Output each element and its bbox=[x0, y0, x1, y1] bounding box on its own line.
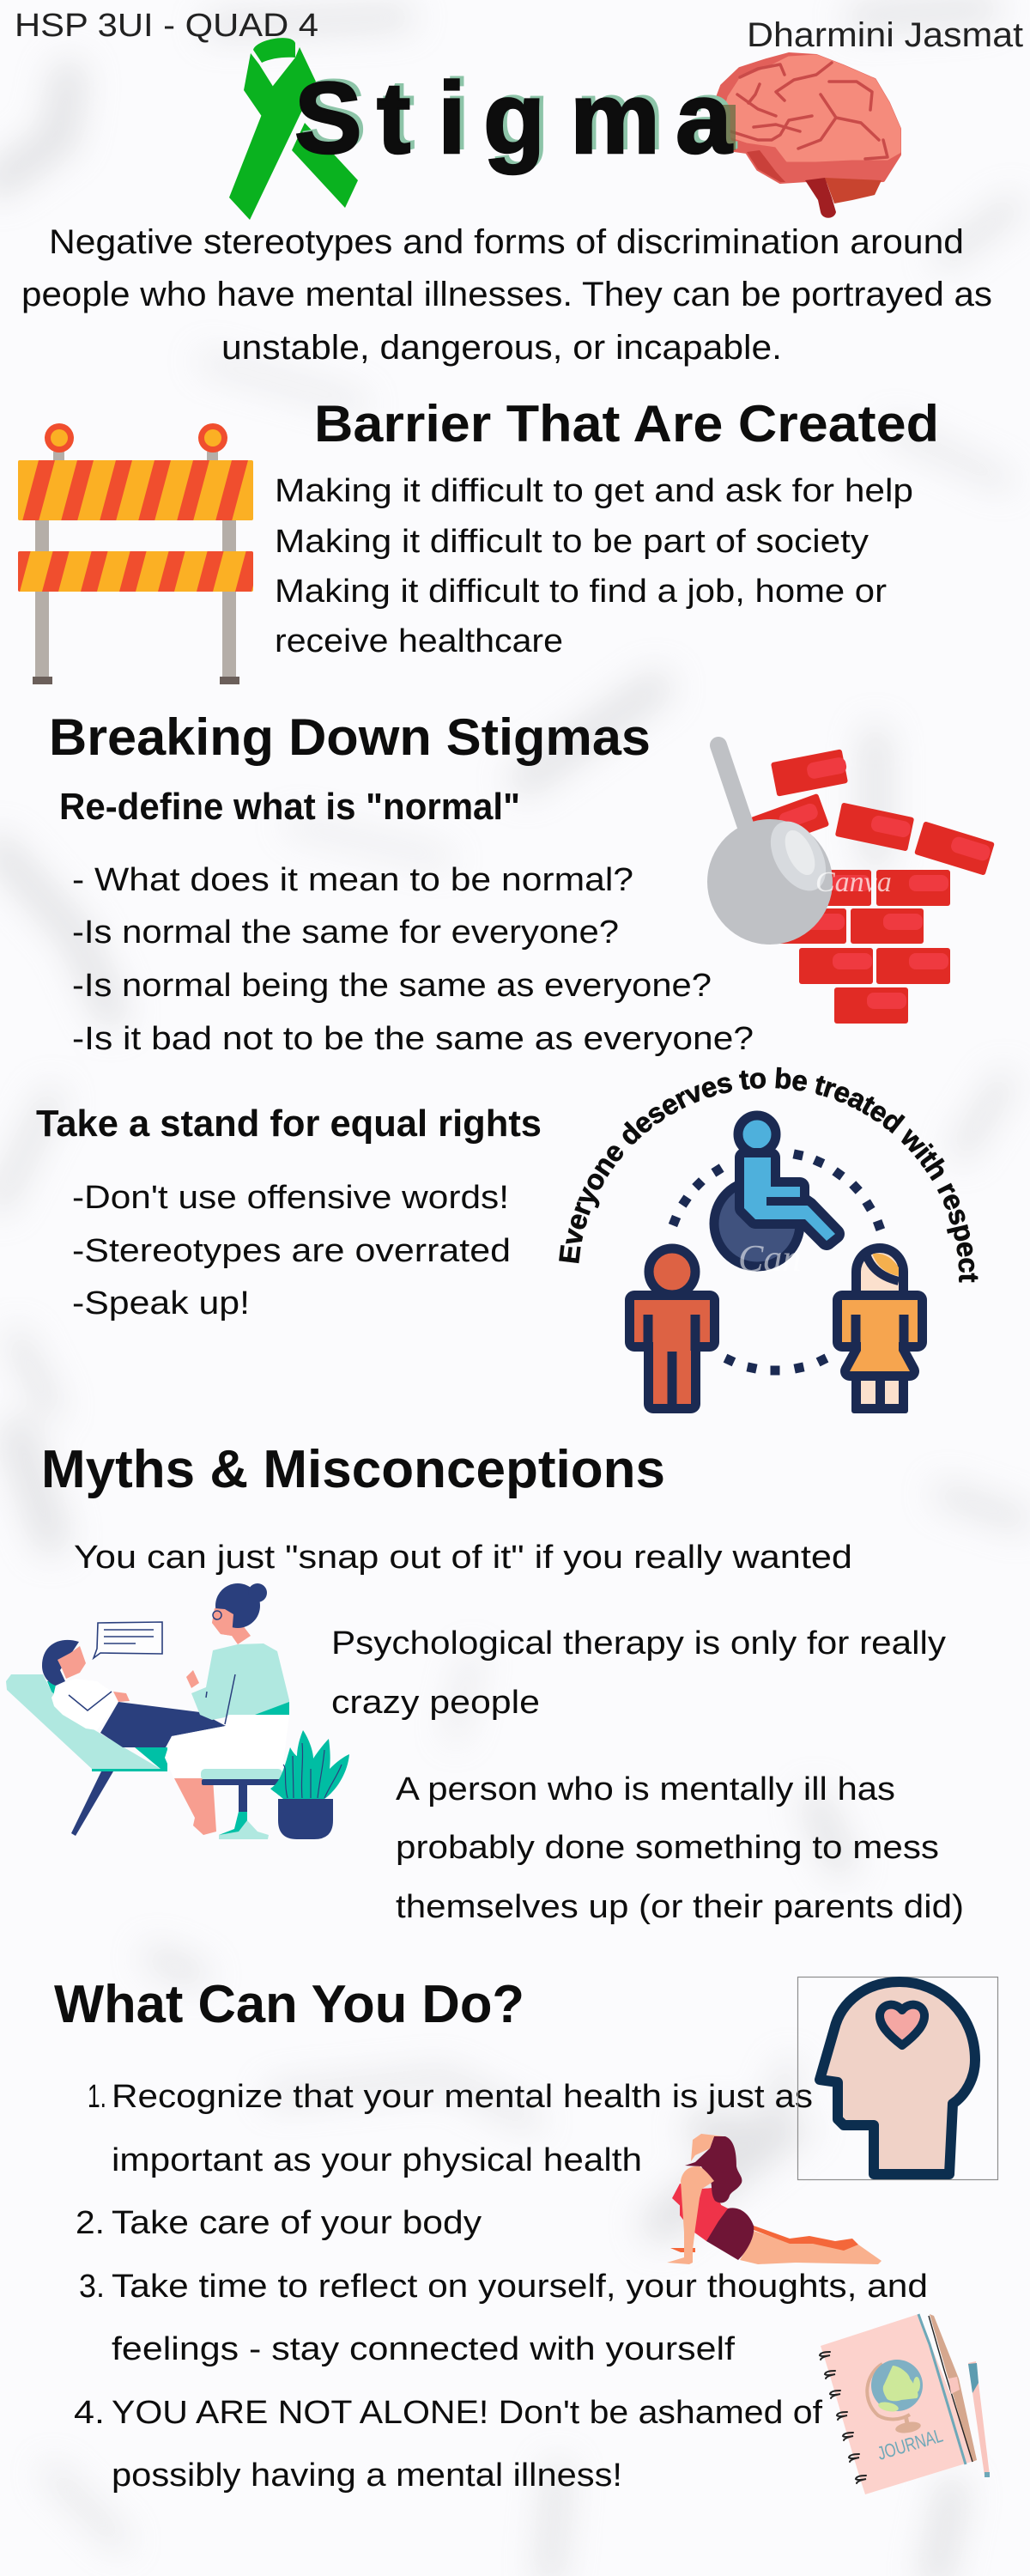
numbered list of actions: important as your physical health bbox=[112, 2142, 642, 2178]
intro text: unstable, dangerous, or incapable. bbox=[221, 329, 782, 367]
barrier list: Making it difficult to be part of society bbox=[275, 524, 869, 560]
normal questions list: -Is it bad not to be the same as everyone? bbox=[72, 1021, 754, 1057]
myth 1: You can just "snap out of it" if you really wanted bbox=[74, 1540, 852, 1576]
numbered list of actions: 4. bbox=[74, 2395, 105, 2431]
author name: Dharmini Jasmat bbox=[747, 16, 1023, 54]
man figure bbox=[634, 1249, 710, 1408]
intro text: people who have mental illnesses. They can be portrayed as bbox=[21, 276, 992, 313]
barrier list: receive healthcare bbox=[275, 623, 563, 659]
icon: brain bbox=[713, 54, 900, 218]
myth 3 bbox=[396, 1771, 964, 1925]
chair bbox=[6, 1674, 167, 1836]
icon: green awareness ribbon bbox=[229, 38, 358, 220]
myth 3: probably done something to mess bbox=[396, 1830, 939, 1866]
icon: road barricade bbox=[18, 423, 253, 684]
myth 3: themselves up (or their parents did) bbox=[396, 1889, 964, 1925]
barrier list: Making it difficult to find a job, home or bbox=[275, 574, 887, 610]
numbered list of actions: 2. bbox=[76, 2205, 105, 2241]
icon: head with heart in framed box bbox=[798, 1977, 997, 2179]
normal questions list bbox=[72, 862, 754, 1057]
equal rights list: -Speak up! bbox=[72, 1285, 250, 1321]
myth 2: crazy people bbox=[331, 1685, 540, 1721]
class label: HSP 3UI - QUAD 4 bbox=[15, 8, 318, 44]
speech bubble bbox=[94, 1622, 162, 1658]
myth 2 bbox=[331, 1625, 946, 1721]
title: Stigma: Stigma bbox=[300, 58, 738, 172]
numbered list of actions: Take time to reflect on yourself, your thoughts, and bbox=[112, 2269, 928, 2305]
numbered list of actions: feelings - stay connected with yourself bbox=[112, 2331, 735, 2367]
wheelchair user bbox=[714, 1115, 835, 1279]
equal rights list: -Stereotypes are overrated bbox=[72, 1233, 511, 1269]
icon: wrecking ball and brick wall bbox=[707, 745, 995, 1024]
equal rights list bbox=[72, 1180, 511, 1321]
dotted circle bbox=[669, 1149, 885, 1376]
heading: Barrier That Are Created: Barrier That Are Created bbox=[314, 395, 939, 453]
icon: wrecking ball and brick wall: Canva bbox=[815, 866, 892, 898]
illustration: journal and pen: JOURNAL bbox=[875, 2425, 945, 2464]
wheelchair user: Can bbox=[738, 1237, 801, 1279]
normal questions list: -Is normal being the same as everyone? bbox=[72, 968, 712, 1004]
numbered list of actions: Take care of your body bbox=[112, 2205, 482, 2241]
myth 3: A person who is mentally ill has bbox=[396, 1771, 895, 1807]
subheading: Take a stand: Take a stand for equal rights bbox=[36, 1103, 542, 1145]
heading: What Can You Do?: What Can You Do? bbox=[54, 1975, 524, 2034]
equal rights list: -Don't use offensive words! bbox=[72, 1180, 509, 1216]
illustration: woman in yoga pose bbox=[667, 2134, 882, 2264]
numbered list of actions: Recognize that your mental health is just as bbox=[112, 2079, 813, 2115]
numbered list of actions: 3. bbox=[79, 2269, 105, 2305]
potted plant bbox=[270, 1730, 349, 1839]
numbered list of actions: 1. bbox=[88, 2079, 106, 2115]
intro text: Negative stereotypes and forms of discrimination around bbox=[49, 223, 964, 261]
curved text: respect message: Everyone deserves to be treated with respect bbox=[559, 1066, 978, 1283]
numbered list of actions: possibly having a mental illness! bbox=[112, 2458, 622, 2494]
barrier list bbox=[275, 473, 913, 659]
woman figure bbox=[842, 1243, 918, 1413]
myth 2: Psychological therapy is only for really bbox=[331, 1625, 946, 1662]
intro text bbox=[21, 223, 992, 367]
icon: three people in a dotted circle bbox=[634, 1115, 918, 1413]
heading: Myths & Misconceptions: Myths & Misconceptions bbox=[41, 1440, 665, 1499]
subheading: Re-define normal: Re-define what is "normal" bbox=[59, 786, 520, 828]
illustration: journal and pen bbox=[820, 2314, 990, 2494]
numbered list of actions bbox=[74, 2079, 928, 2494]
patient bbox=[42, 1640, 226, 1747]
normal questions list: -Is normal the same for everyone? bbox=[72, 914, 619, 951]
title: Stigma: Stigma bbox=[294, 62, 733, 175]
stool bbox=[201, 1769, 282, 1839]
therapist bbox=[165, 1583, 289, 1835]
numbered list of actions: YOU ARE NOT ALONE! Don't be ashamed of bbox=[112, 2395, 822, 2431]
barrier list: Making it difficult to get and ask for help bbox=[275, 473, 913, 509]
illustration: therapy session bbox=[6, 1583, 349, 1839]
heading: Breaking Down Stigmas: Breaking Down Stigmas bbox=[49, 708, 651, 766]
normal questions list: - What does it mean to be normal? bbox=[72, 862, 633, 898]
